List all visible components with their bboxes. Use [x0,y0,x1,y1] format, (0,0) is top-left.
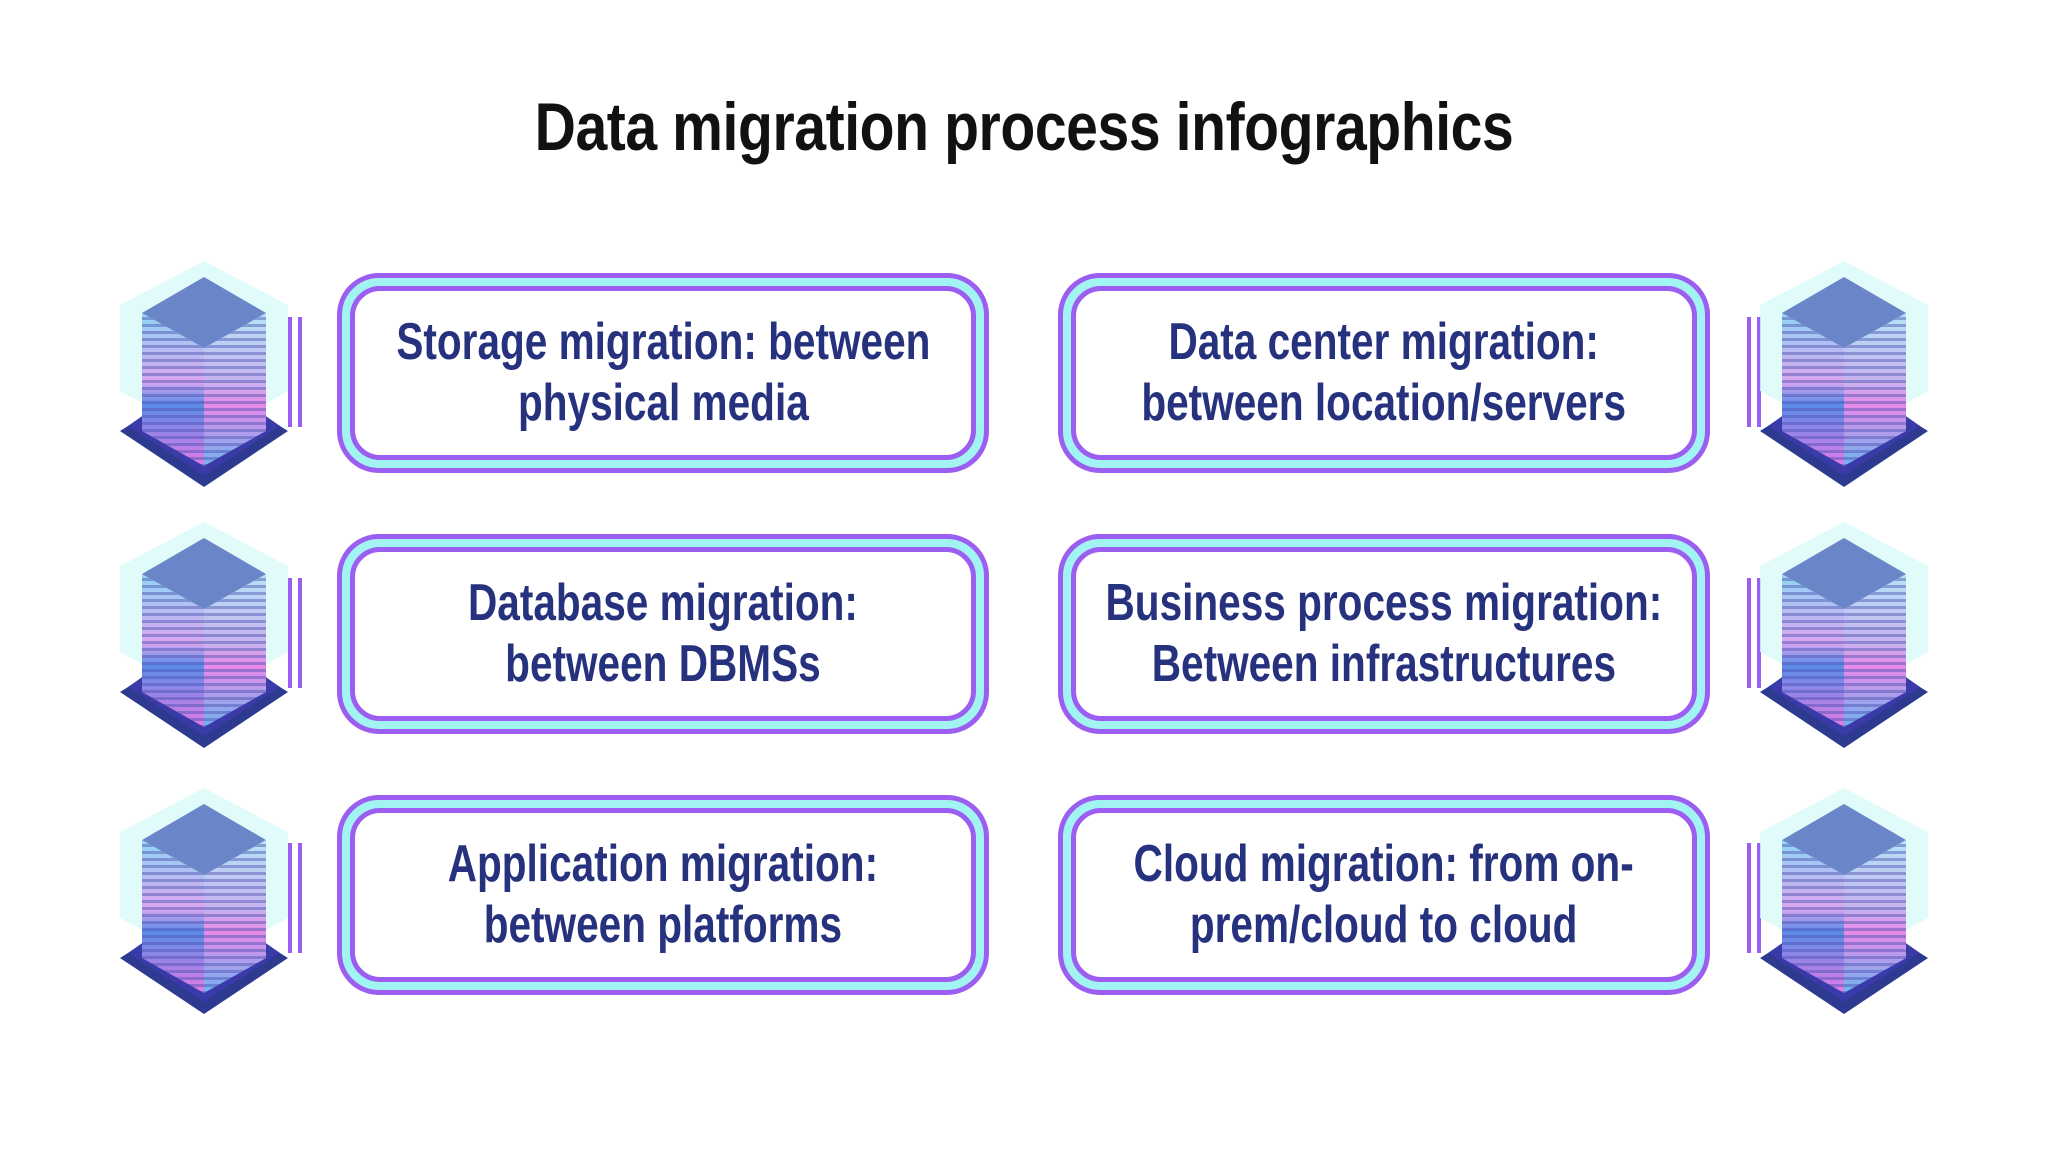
server icon row 2 left [120,522,288,748]
box: application migration [337,795,989,995]
server icon row 1 left [120,261,288,487]
box: application migration: between platforms [484,896,842,954]
box: database migration [337,534,989,734]
server icon row 3 right [1760,788,1928,1014]
box: storage migration: physical media [518,374,808,432]
box: cloud migration: Cloud migration: from on- [1134,835,1634,893]
box: application migration: Application migration: [448,835,878,893]
connector bars row 3 right [1747,843,1761,953]
title: Data migration process infographics [535,89,1513,165]
box: data center migration [1058,273,1710,473]
server icon row 2 right [1760,522,1928,748]
box: storage migration [337,273,989,473]
box: business process migration: Between infrastructures [1152,635,1616,693]
box: database migration: between DBMSs [505,635,821,693]
connector bars row 1 right [1747,317,1761,427]
box: cloud migration [1058,795,1710,995]
box: data center migration: between location/servers [1142,374,1626,432]
box: storage migration: Storage migration: between [396,313,930,371]
box: business process migration [1058,534,1710,734]
box: business process migration: Business process migration: [1106,574,1662,632]
connector bars row 2 left [288,578,302,688]
server icon row 1 right [1760,261,1928,487]
box: data center migration: Data center migration: [1169,313,1599,371]
server icon row 3 left [120,788,288,1014]
connector bars row 1 left [288,317,302,427]
box: database migration: Database migration: [468,574,858,632]
connector bars row 3 left [288,843,302,953]
box: cloud migration: prem/cloud to cloud [1190,896,1578,954]
connector bars row 2 right [1747,578,1761,688]
